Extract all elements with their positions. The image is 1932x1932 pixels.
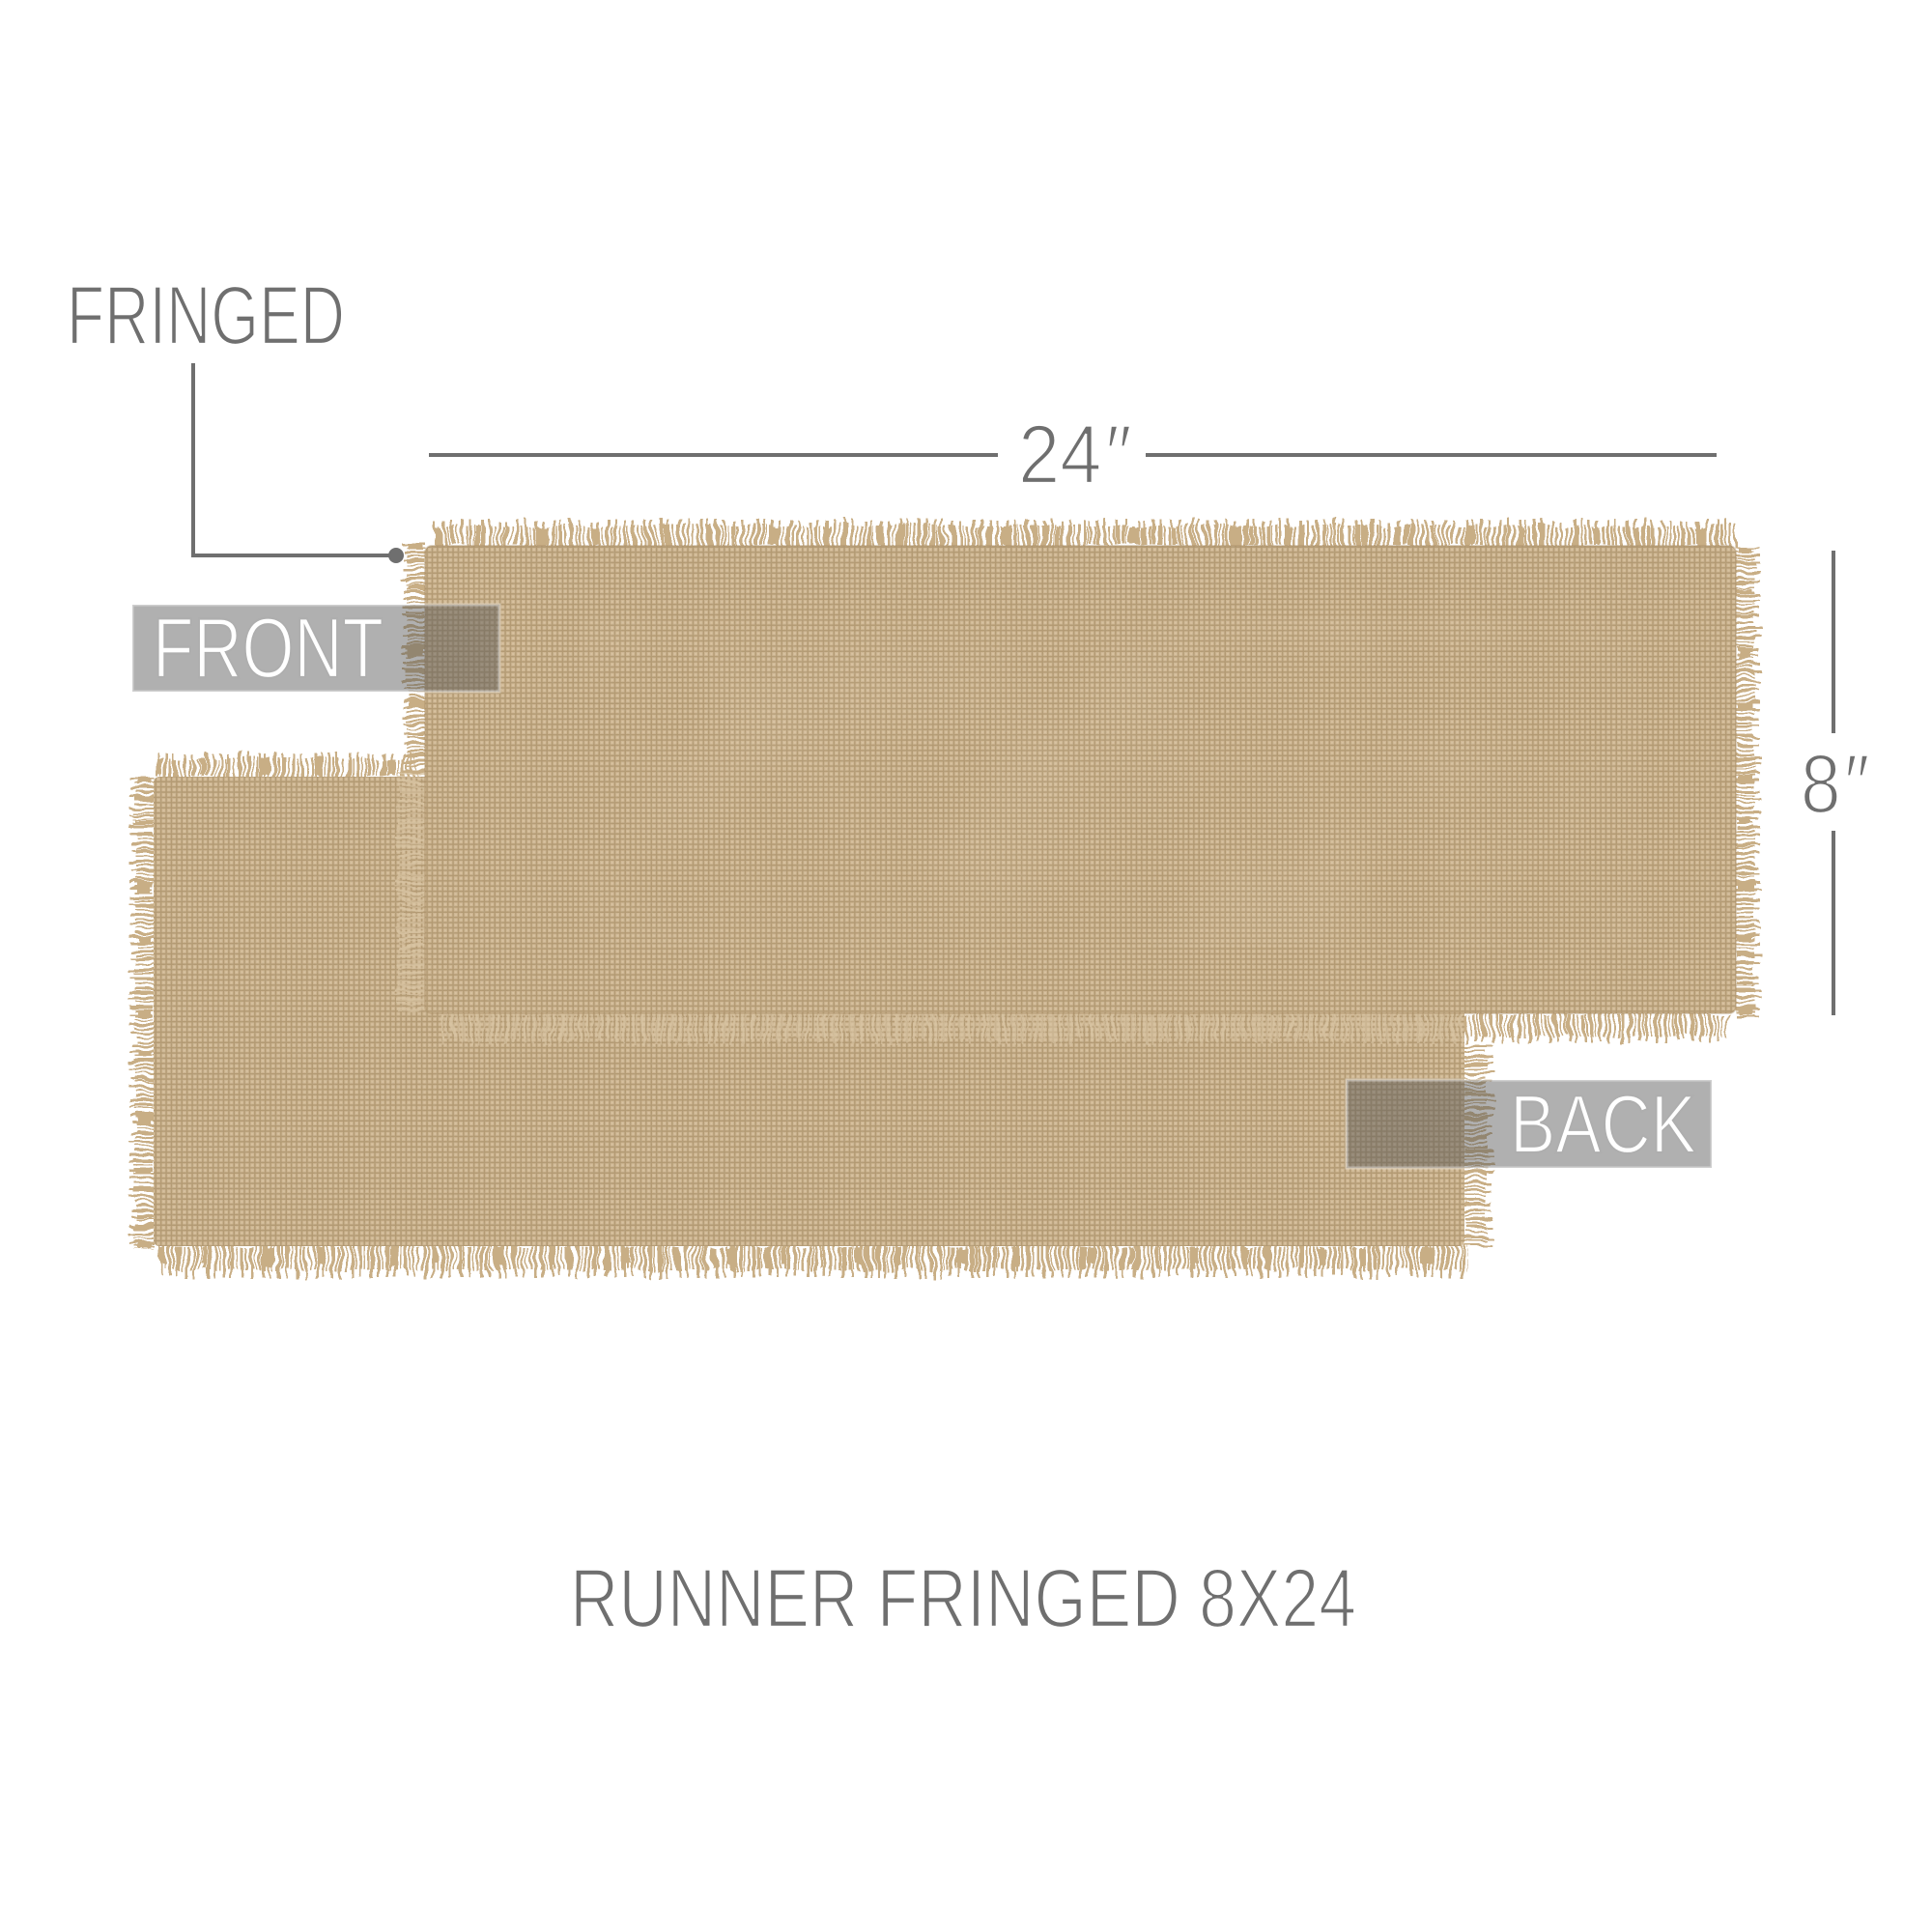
fringed callout leader line — [193, 363, 404, 563]
width dimension: 24 inches: 24″ — [1018, 409, 1130, 501]
front runner fringe shown against back runner — [412, 773, 1464, 1028]
front tag: FRONT — [153, 600, 384, 696]
fabric lightening — [580, 618, 1642, 947]
back runner woven body — [154, 777, 1464, 1246]
back tag: BACK — [1510, 1079, 1696, 1171]
front runner woven body — [425, 546, 1736, 1013]
back runner texture — [154, 777, 1464, 1246]
back runner — [142, 765, 1479, 1262]
front runner fringe — [414, 533, 1747, 1028]
back tag — [1347, 1079, 1712, 1171]
fringed callout label: FRINGED — [67, 270, 345, 362]
front runner — [414, 533, 1747, 1028]
front runner texture — [425, 546, 1736, 1013]
product title: RUNNER FRINGED 8X24 — [570, 1552, 1356, 1645]
height dimension: 8 inches: 8″ — [1801, 738, 1868, 831]
back runner fringe — [142, 765, 1479, 1262]
